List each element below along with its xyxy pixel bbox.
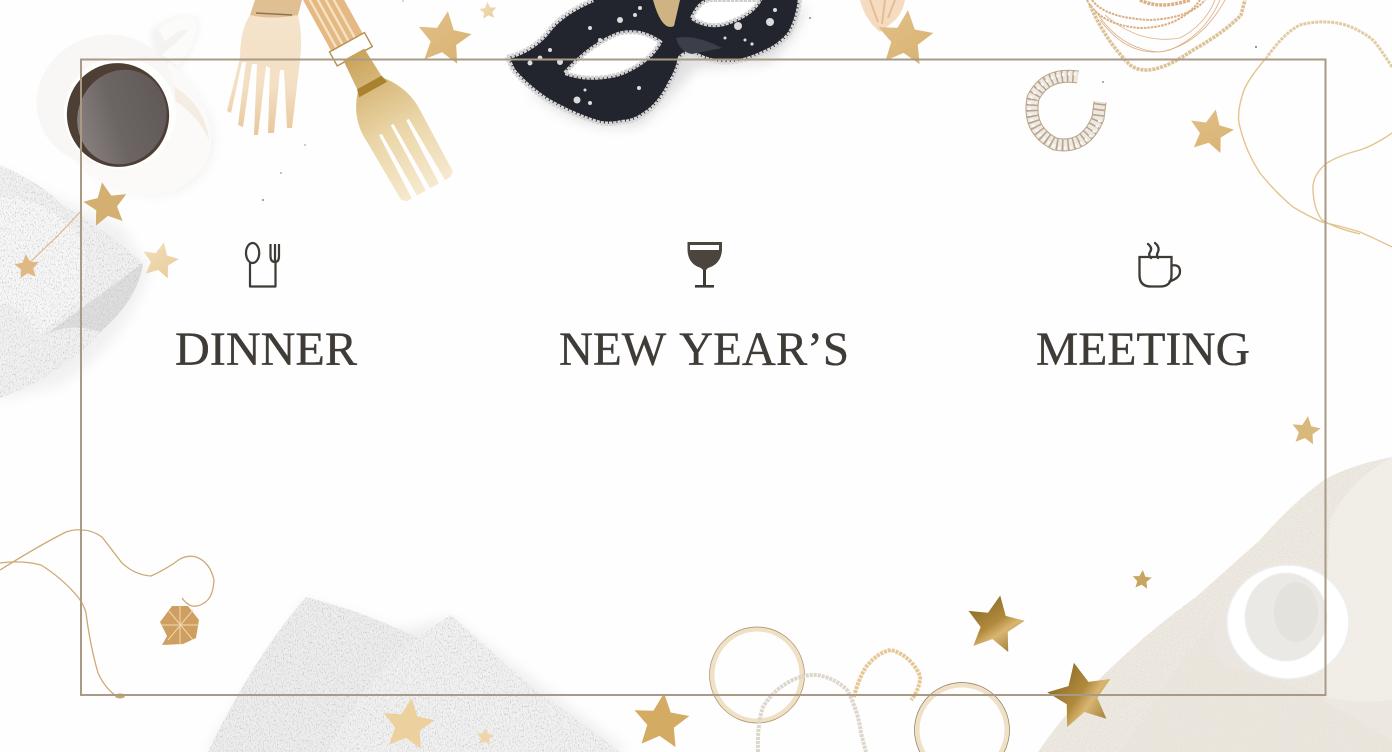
heading: new year's: NEW YEAR’S — [559, 323, 849, 376]
left folded napkin — [0, 165, 150, 400]
thin card frame — [81, 60, 1326, 695]
bottom gold rings and chains — [710, 627, 1010, 752]
fork: champagne gold — [227, 0, 302, 135]
black masquerade mask — [507, 0, 805, 127]
column: dinner — [175, 243, 357, 376]
crystal earring — [1030, 74, 1100, 148]
white ring bowl — [1214, 565, 1349, 679]
gold chain with pendant — [0, 530, 214, 698]
cream linen cloth — [1038, 457, 1392, 752]
column: meeting — [1036, 243, 1250, 376]
heading: dinner: DINNER — [175, 323, 357, 376]
icon: wine glass — [688, 242, 722, 288]
heading: meeting: MEETING — [1036, 323, 1250, 376]
bottom grey knitted cloth — [205, 597, 630, 752]
column: new year's — [559, 242, 849, 376]
icon: spoon and fork — [246, 243, 279, 286]
confetti flakes and gold chains at top — [860, 0, 1245, 70]
tie wire and stray specks — [30, 0, 1257, 262]
icon: steaming cup — [1140, 243, 1180, 286]
fork: polished gold — [292, 0, 456, 204]
fine gold wires on right — [1239, 22, 1392, 247]
coffee mug — [18, 15, 213, 195]
